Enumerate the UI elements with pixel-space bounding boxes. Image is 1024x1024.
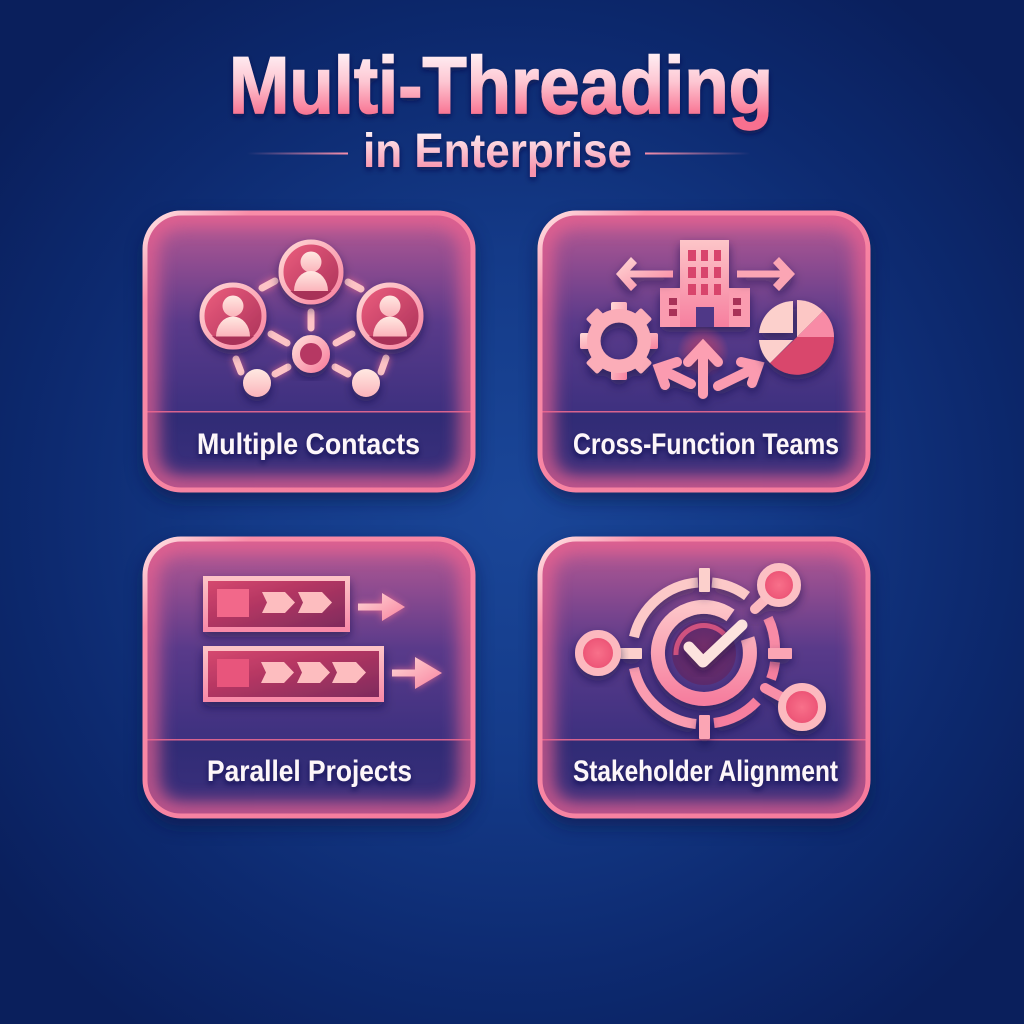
building [660,240,750,327]
subtitle: in Enterprise [363,125,632,178]
alignment ticks [620,568,792,739]
contact top [281,242,341,302]
centre highlight [676,626,724,655]
node left [579,634,617,672]
icon: parallel bars [206,578,442,700]
node bottom right [765,687,822,727]
glow behind arrows [677,326,729,378]
node top right [755,567,797,609]
subtitle rule right [645,152,750,154]
network dashes [236,281,386,374]
project bar 2 [206,648,382,700]
label: Stakeholder Alignment [573,755,838,788]
outer ring [634,582,775,724]
icon: target with check [579,567,822,739]
icon: gear [580,302,658,380]
centre disc [672,621,736,685]
arrow left [616,257,673,291]
label: Multiple Contacts [197,428,420,461]
arrows: upward group [659,346,758,394]
arrow 1 [358,593,405,621]
card base [538,537,870,826]
panel: cross-function teams [538,211,870,500]
icon: pie chart [759,300,834,375]
panel: multiple contacts [143,211,475,500]
contact left [202,285,264,347]
arrow 2 [392,657,442,689]
panel: parallel projects [143,537,475,826]
card base [143,211,475,500]
label: Cross-Function Teams [573,428,839,461]
icon: building with functions [580,240,834,394]
small node right [352,369,380,397]
label: Parallel Projects [207,755,412,788]
icon: contact network [202,242,421,397]
inner ring [658,607,750,699]
small node left [243,369,271,397]
contact right [359,285,421,347]
subtitle rule left [247,152,348,154]
title: Multi-Threading [229,41,773,131]
check mark [689,625,742,662]
project bar 1 [206,578,348,630]
card base [143,537,475,826]
card base [538,211,870,500]
panel: stakeholder alignment [538,537,870,826]
hub node [296,339,326,369]
arrow right [737,257,795,291]
